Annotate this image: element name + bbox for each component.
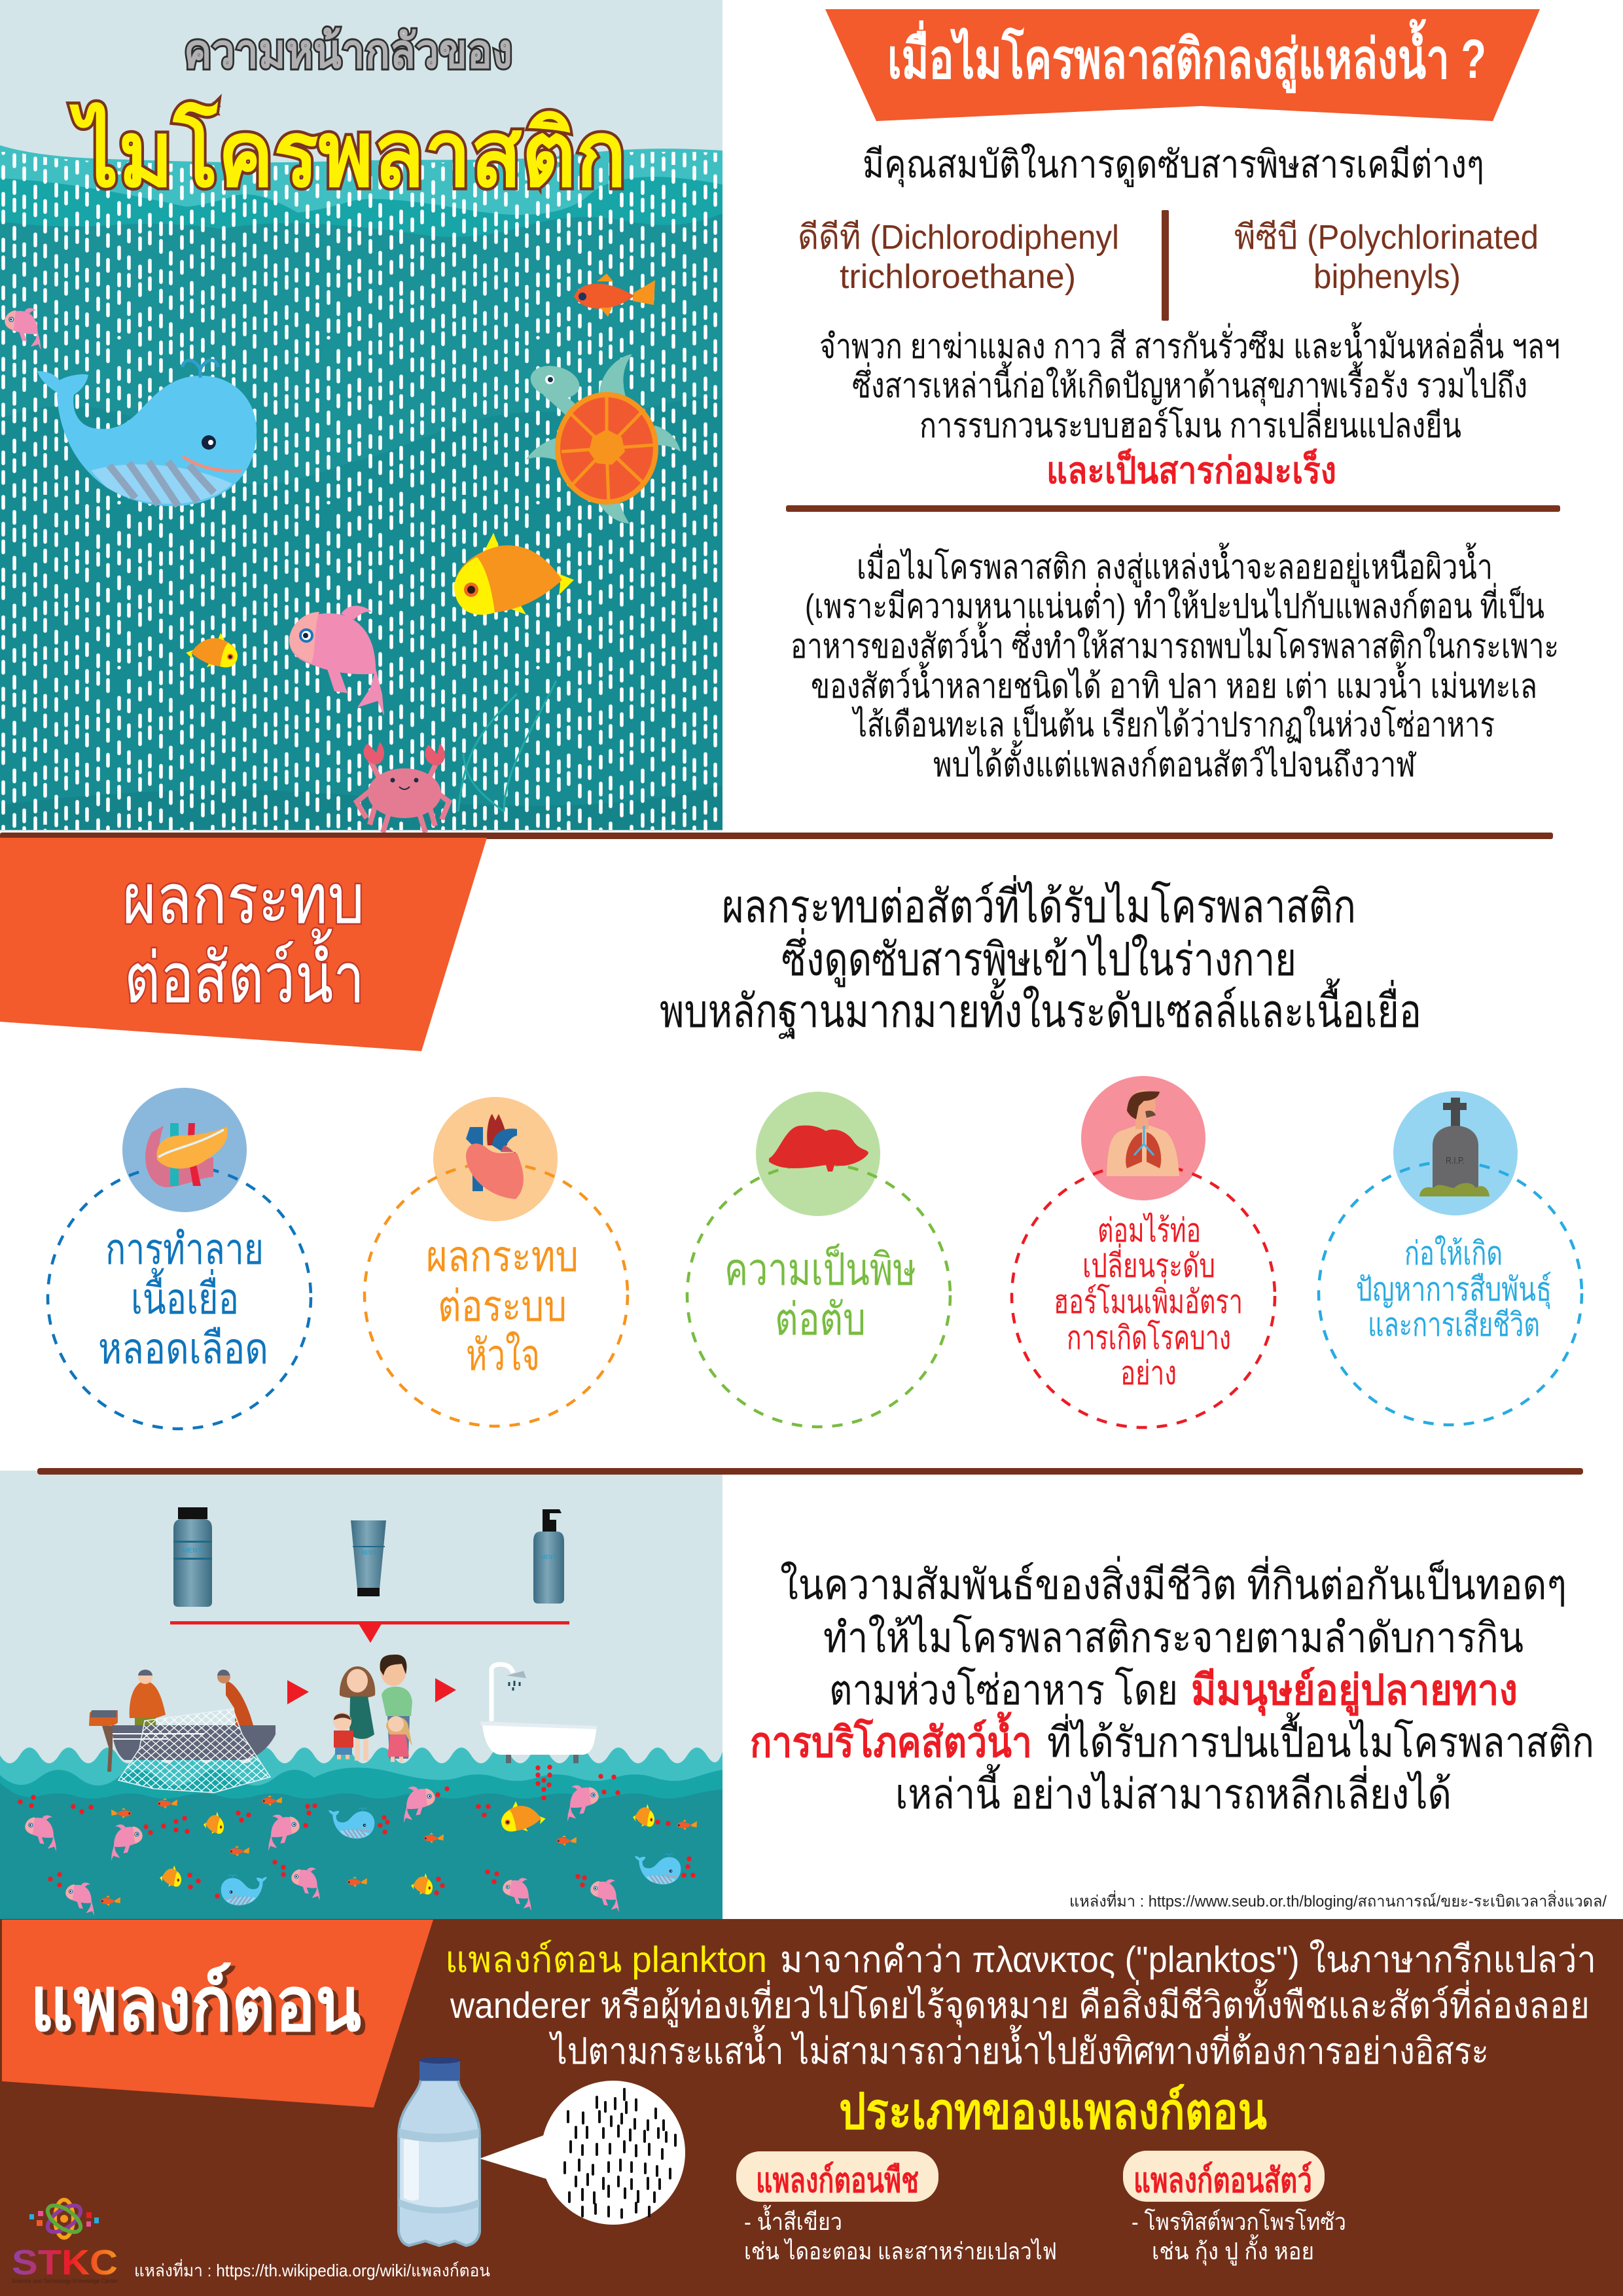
text block: food chain explanation: เมื่อไมโครพลาสติก ลงสู่แหล่งน้ำจะลอยอยู่เหนือผิวน้ำ — [857, 543, 1493, 588]
text block: health effects — [819, 322, 1560, 491]
label: ปัญหาการสืบพันธุ์ — [1356, 1271, 1552, 1309]
label: และการเสียชีวิต — [1368, 1306, 1540, 1343]
text block: bioaccumulation to humans: มีมนุษย์อยู่ปลายทาง — [1191, 1666, 1518, 1716]
icon: large orange fish — [454, 533, 574, 615]
icon: plastic bottle — [399, 2057, 480, 2246]
icon: small orange fish — [186, 633, 238, 668]
icon: pump bottle — [533, 1509, 564, 1604]
label: หลอดเลือด — [98, 1324, 268, 1372]
icon: gravestone: R.I.P. — [1446, 1155, 1465, 1166]
logo: STKC: STKC — [12, 2243, 118, 2282]
heading: impact on animals: พบหลักฐานมากมายทั้งในระดับเซลล์และเนื้อเยื่อ — [660, 978, 1421, 1039]
sea creatures — [25, 1785, 697, 1916]
banner: impact on aquatic animals: ผลกระทบ — [122, 861, 365, 938]
heading: impact on animals — [660, 875, 1421, 1039]
impact circle: endocrine disruption — [1012, 1076, 1275, 1427]
banner: impact on aquatic animals: ต่อสัตว์น้ำ — [124, 928, 365, 1017]
label: การเกิดโรคบาง — [1067, 1319, 1231, 1356]
impact circle: vascular tissue — [48, 1088, 311, 1429]
heading: impact on animals: ซึ่งดูดซับสารพิษเข้าไปในร่างกาย — [781, 928, 1296, 988]
icon: family — [333, 1655, 412, 1762]
microplastic particles — [18, 1765, 696, 1899]
icon: bottle: MEN'S — [183, 1547, 203, 1554]
label: เปลี่ยนระดับ — [1082, 1244, 1215, 1284]
card: zooplankton — [1123, 2151, 1346, 2266]
label: ก่อให้เกิด — [1404, 1235, 1503, 1272]
card: phytoplankton: เช่น ไดอะตอม และสาหร่ายเปลวไฟ — [744, 2238, 1057, 2265]
text block: bioaccumulation to humans: ตามห่วงโซ่อาหาร โดย — [829, 1666, 1178, 1713]
text block: plankton definition — [445, 1939, 1596, 2072]
icon: red fish — [574, 274, 655, 317]
label — [724, 1244, 916, 1344]
text block: bioaccumulation to humans — [750, 1556, 1594, 1818]
panel: food chain scene — [0, 1471, 722, 1919]
icon: pump bottle: MEN'S — [541, 1554, 556, 1560]
banner: when microplastics enter water — [825, 9, 1540, 121]
impact circle: reproduction and death — [1319, 1091, 1582, 1425]
label: ผลกระทบ — [426, 1232, 579, 1280]
panel: ocean scene with title — [0, 0, 722, 833]
card: phytoplankton — [736, 2151, 1057, 2265]
callout: magnified microplastics — [480, 2081, 685, 2225]
label — [1054, 1212, 1243, 1391]
icon: pancreas — [145, 1123, 228, 1187]
text block: food chain explanation: พบได้ตั้งแต่แพลงก์ตอนสัตว์ไปจนถึงวาฬ — [933, 740, 1417, 784]
label: ต่อระบบ — [438, 1282, 567, 1330]
text block: PCB: biphenyls) — [1313, 258, 1461, 296]
banner: plankton — [2, 1920, 433, 2108]
panel: plankton — [0, 1919, 1623, 2296]
label — [98, 1225, 268, 1372]
title line: ความหน้ากลัวของ: ความหน้ากลัวของ — [184, 26, 512, 78]
text block: bioaccumulation to humans: เหล่านี้ อย่างไม่สามารถหลีกเลี่ยงได้ — [895, 1764, 1452, 1818]
impact circle: cardiovascular — [365, 1097, 628, 1426]
card: zooplankton: - โพรทิสต์พวกโพรโทซัว — [1132, 2208, 1346, 2235]
label: เนื้อเยื่อ — [131, 1268, 239, 1323]
arrow: products into family — [170, 1621, 569, 1643]
label: หัวใจ — [466, 1331, 540, 1379]
card: zooplankton: เช่น กุ้ง ปู กั้ง หอย — [1152, 2234, 1314, 2266]
impact circle: liver toxicity — [687, 1092, 950, 1427]
label: อย่าง — [1120, 1355, 1177, 1391]
icon: bathtub and shower — [480, 1664, 597, 1763]
source credit: wikipedia: แหล่งที่มา : https://th.wikipedia.org/wiki/แพลงก์ตอน — [134, 2259, 490, 2280]
text block: bioaccumulation to humans: ทำให้ไมโครพลาสติกระจายตามลำดับการกิน — [823, 1614, 1524, 1661]
arrow: boat to family — [287, 1680, 309, 1704]
card: phytoplankton: - น้ำสีเขียว — [744, 2204, 842, 2235]
icon: fishermen on boat — [89, 1670, 276, 1793]
icon: crab — [357, 742, 449, 833]
label — [426, 1232, 579, 1379]
icon: heart — [466, 1114, 524, 1199]
text block: health effects: การรบกวนระบบฮอร์โมน การเปลี่ยนแปลงยีน — [919, 402, 1461, 445]
text block: DDT — [798, 219, 1119, 296]
icon: tube: MEN'S — [361, 1549, 376, 1556]
icon: whale — [37, 361, 257, 506]
text block: plankton definition: แพลงก์ตอน plankton — [445, 1939, 767, 1980]
source credit: seub: แหล่งที่มา : https://www.seub.or.th/bloging/สถานการณ์/ขยะ-ระเบิดเวลาสิ่งแวดล/ — [1069, 1890, 1607, 1910]
text block: PCB: พีซีบี (Polychlorinated — [1234, 219, 1539, 257]
label: ต่อตับ — [775, 1295, 866, 1344]
label: ฮอร์โมนเพิ่มอัตรา — [1054, 1280, 1243, 1320]
icon: tube — [351, 1520, 386, 1596]
icon: bottle — [173, 1507, 212, 1607]
label: ความเป็นพิษ — [724, 1244, 916, 1295]
label — [1356, 1235, 1552, 1343]
text block: DDT: trichloroethane) — [840, 258, 1076, 296]
text block: DDT: ดีดีที (Dichlorodiphenyl — [798, 219, 1119, 257]
banner: plankton: แพลงก์ตอน — [30, 1962, 361, 2047]
logo: STKC: Science and Technology Knowledge Center — [12, 2278, 118, 2284]
icon: gravestone — [1419, 1098, 1489, 1196]
banner: impact on aquatic animals — [0, 838, 487, 1051]
text block: health effects: และเป็นสารก่อมะเร็ง — [1046, 448, 1336, 491]
text block: bioaccumulation to humans: การบริโภคสัตว์น้ำ — [750, 1712, 1032, 1766]
heading: impact on animals: ผลกระทบต่อสัตว์ที่ได้รับไมโครพลาสติก — [722, 875, 1356, 932]
icon: man with lungs — [1107, 1090, 1179, 1176]
label: การทำลาย — [105, 1225, 264, 1273]
icon: liver — [769, 1125, 868, 1172]
card: zooplankton: แพลงก์ตอนสัตว์ — [1133, 2161, 1312, 2200]
title line: ไมโครพลาสติก: ไมโครพลาสติก — [69, 101, 626, 206]
text block: absorption property: มีคุณสมบัติในการดูดซับสารพิษสารเคมีต่างๆ — [863, 143, 1484, 188]
text block: PCB — [1234, 219, 1539, 296]
icon: small pink fish — [5, 308, 41, 350]
icon: large pink fish — [289, 606, 384, 716]
logo: STKC — [12, 2200, 118, 2284]
text block: plankton definition: ไปตามกระแสน้ำ ไม่สามารถว่ายน้ำไปยังทิศทางที่ต้องการอย่างอิสระ — [548, 2025, 1489, 2072]
card: phytoplankton: แพลงก์ตอนพืช — [756, 2161, 919, 2200]
label: ต่อมไร้ท่อ — [1097, 1212, 1201, 1249]
text block: food chain explanation — [791, 543, 1559, 784]
heading: types of plankton: ประเภทของแพลงก์ตอน — [839, 2084, 1267, 2140]
arrow: family to bathroom — [435, 1678, 456, 1702]
icon: sea turtle — [526, 354, 681, 524]
